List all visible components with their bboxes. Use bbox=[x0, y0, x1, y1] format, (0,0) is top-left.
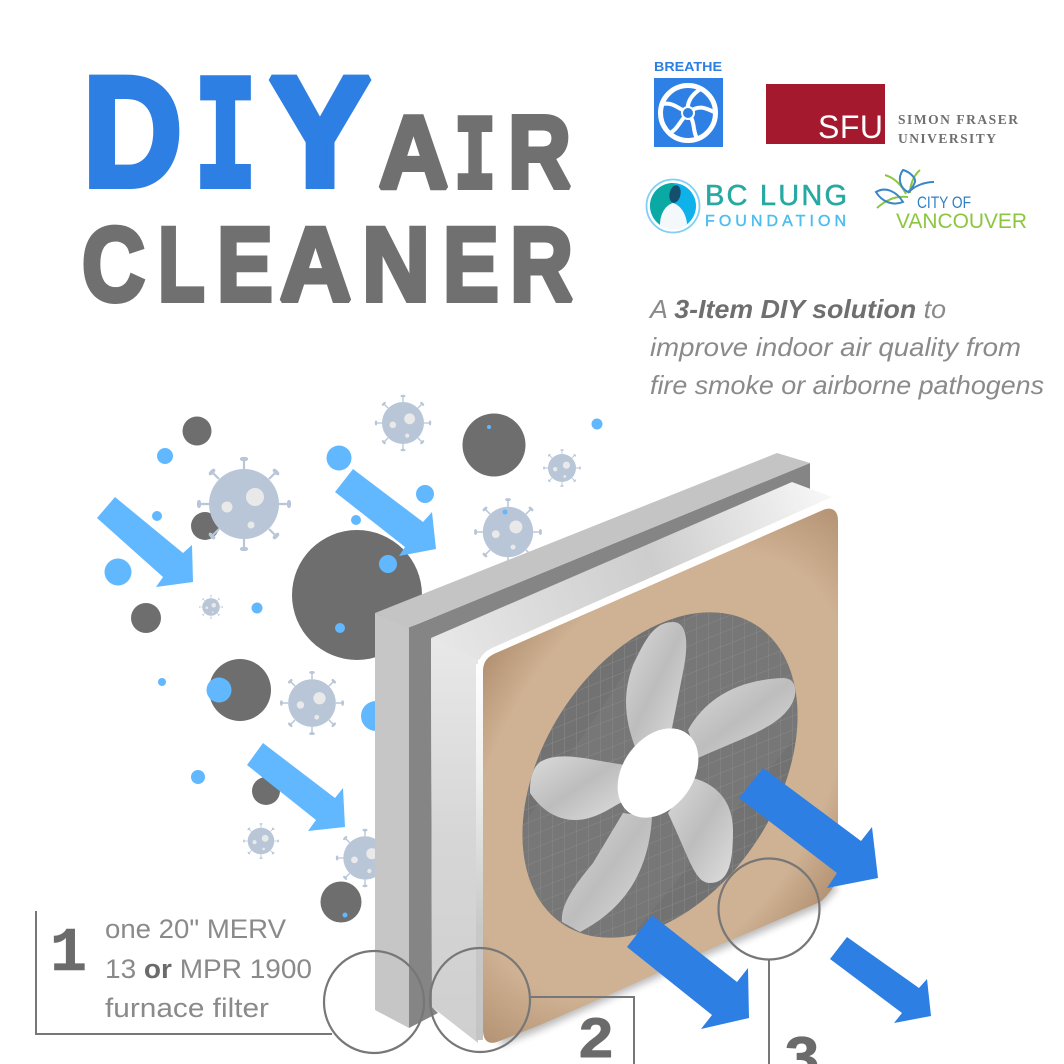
fan hub bbox=[601, 713, 715, 833]
logo: City of Vancouver: CITY OF bbox=[917, 193, 971, 212]
title word: CLEANER: E bbox=[217, 206, 273, 324]
callout 1: filter bbox=[36, 911, 424, 1053]
callout 2: tape bbox=[430, 948, 634, 1064]
virus particles bbox=[198, 395, 580, 887]
arrow: outgoing air C bbox=[830, 937, 931, 1023]
arrow: incoming air 3 bbox=[247, 743, 345, 831]
logo: City of Vancouver bbox=[876, 170, 1027, 233]
logo: BC Lung Foundation bbox=[646, 180, 847, 232]
callout 1: filter: one 20" MERV bbox=[105, 914, 286, 944]
callout 1: filter: furnace filter bbox=[105, 993, 269, 1023]
airborne droplets bbox=[104, 418, 602, 918]
logo: Breathe: BREATHE bbox=[654, 59, 722, 74]
box fan housing bbox=[431, 482, 838, 1046]
furnace filter bbox=[375, 453, 810, 1028]
callout 3: box fan bbox=[718, 858, 820, 1064]
title bbox=[82, 46, 573, 324]
logo: BC Lung Foundation: BC LUNG bbox=[705, 180, 847, 212]
smoke particles bbox=[131, 414, 526, 922]
arrow: outgoing air A bbox=[739, 768, 878, 888]
title word: DIY: Y bbox=[269, 46, 371, 220]
arrow: incoming air 1 bbox=[97, 497, 193, 587]
logo: SFU: SIMON FRASER bbox=[898, 112, 1018, 127]
title word: AIR: A bbox=[378, 94, 448, 210]
callout 1: filter: 13 or MPR 1900 bbox=[105, 954, 312, 984]
logo: SFU: UNIVERSITY bbox=[898, 131, 996, 146]
logo: Breathe bbox=[654, 59, 723, 147]
tagline text: fire smoke or airborne pathogens bbox=[650, 370, 1044, 400]
logo: City of Vancouver: VANCOUVER bbox=[896, 210, 1027, 233]
title word: CLEANER: N bbox=[362, 206, 430, 324]
title word: CLEANER: R bbox=[510, 206, 573, 324]
logo: SFU bbox=[766, 84, 1018, 146]
title word: CLEANER: L bbox=[158, 206, 205, 324]
title word: CLEANER: C bbox=[82, 206, 145, 324]
title word: DIY: I bbox=[194, 50, 256, 234]
tagline text bbox=[648, 294, 1044, 400]
title word: DIY bbox=[83, 46, 371, 234]
tagline text: improve indoor air quality from bbox=[650, 332, 1021, 362]
title word: CLEANER: A bbox=[280, 206, 352, 324]
title word: CLEANER: E bbox=[443, 206, 499, 324]
title word: AIR: R bbox=[508, 94, 571, 210]
title word: DIY: D bbox=[83, 46, 182, 220]
fan opening with grille bbox=[522, 612, 798, 938]
arrow: outgoing air B bbox=[627, 915, 749, 1029]
tagline text: A 3-Item DIY solution to bbox=[648, 294, 946, 324]
title word: CLEANER bbox=[82, 206, 573, 324]
logo: SFU: SFU bbox=[818, 109, 883, 145]
callout 1: filter: 1 bbox=[50, 918, 87, 989]
logo: BC Lung Foundation: FOUNDATION bbox=[705, 213, 846, 230]
title word: AIR bbox=[378, 94, 571, 220]
fan blades bbox=[530, 622, 795, 932]
arrow: incoming air 2 bbox=[335, 469, 436, 556]
title word: AIR: I bbox=[454, 100, 496, 220]
